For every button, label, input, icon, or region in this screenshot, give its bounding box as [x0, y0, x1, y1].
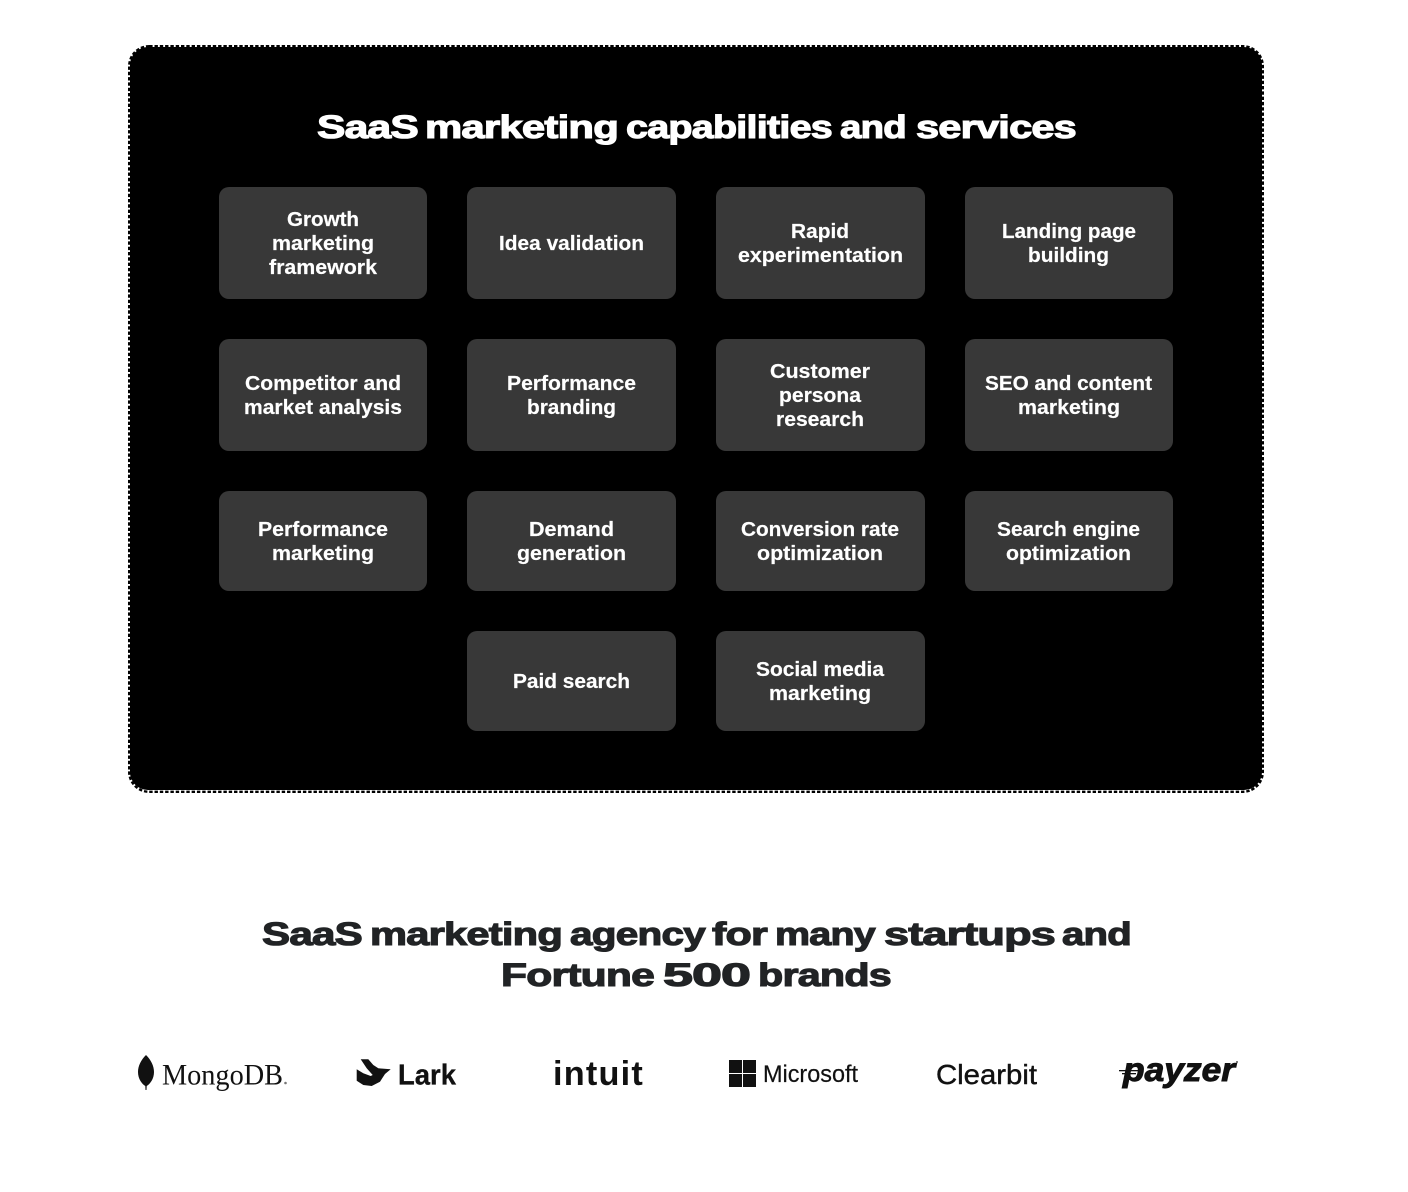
card: Search engine optimization: optimization — [1006, 543, 1131, 565]
card: Competitor and market analysis — [219, 339, 427, 451]
card: Landing page building: building — [1028, 245, 1109, 267]
card: Social media marketing — [716, 631, 925, 731]
card: Performance branding — [467, 339, 676, 451]
logo: Lark — [357, 1059, 457, 1092]
heading: agency clients: startups — [884, 916, 1055, 952]
heading: agency clients: 500 — [663, 957, 750, 993]
card: Customer persona research: research — [776, 409, 864, 431]
card: Growth marketing framework: marketing — [272, 233, 374, 255]
heading: agency clients: brands — [758, 957, 891, 993]
heading: agency clients: marketing — [370, 916, 562, 952]
card: Demand generation: generation — [517, 543, 626, 565]
card: Competitor and market analysis: Competitor and — [245, 373, 401, 395]
heading: agency clients: Fortune — [501, 957, 654, 993]
heading: agency clients: and — [1062, 916, 1131, 952]
card: Conversion rate optimization — [716, 491, 925, 591]
card: Growth marketing framework: Growth — [287, 209, 359, 231]
card: Paid search — [467, 631, 676, 731]
card: Performance branding: Performance — [507, 373, 636, 395]
card: Customer persona research: Customer — [770, 361, 870, 383]
heading: capabilities — [317, 109, 1076, 145]
card: Conversion rate optimization: optimization — [757, 543, 883, 565]
card: Search engine optimization: Search engine — [997, 519, 1140, 541]
logo: Lark: Lark — [398, 1060, 457, 1092]
heading: capabilities: marketing — [425, 109, 618, 145]
heading: agency clients: many — [775, 916, 876, 952]
card: Growth marketing framework — [219, 187, 427, 299]
card: Performance marketing: marketing — [272, 543, 374, 565]
card: Search engine optimization — [965, 491, 1173, 591]
heading: capabilities: services — [916, 109, 1076, 145]
card: Idea validation — [467, 187, 676, 299]
heading: capabilities: capabilities — [626, 109, 832, 145]
heading: agency clients — [262, 916, 1131, 993]
logo: Intuit: intuit — [553, 1055, 644, 1093]
panel: capabilities and services — [129, 46, 1263, 792]
card: Paid search: Paid search — [513, 671, 630, 693]
card: Customer persona research: persona — [779, 385, 862, 407]
card: Landing page building — [965, 187, 1173, 299]
logo row — [138, 1051, 1238, 1093]
card: Demand generation: Demand — [529, 519, 614, 541]
card: Conversion rate optimization: Conversion rate — [741, 519, 899, 541]
card: Social media marketing: Social media — [756, 659, 885, 681]
logo: payzer: payzer — [1122, 1051, 1237, 1088]
card: SEO and content marketing — [965, 339, 1173, 451]
card: Rapid experimentation — [716, 187, 925, 299]
card: Demand generation — [467, 491, 676, 591]
card: Performance marketing — [219, 491, 427, 591]
card: Competitor and market analysis: market analysis — [244, 397, 402, 419]
card: Idea validation: Idea validation — [499, 233, 644, 255]
heading: agency clients: SaaS — [262, 916, 362, 952]
heading: agency clients: agency — [570, 916, 706, 952]
logo: Microsoft: Microsoft — [763, 1061, 858, 1088]
heading: agency clients: for — [712, 916, 767, 952]
card: Rapid experimentation: experimentation — [738, 245, 903, 267]
card: SEO and content marketing: SEO and content — [985, 373, 1152, 395]
heading: capabilities: SaaS — [317, 109, 418, 145]
heading: capabilities: and — [840, 109, 906, 145]
card: Social media marketing: marketing — [769, 683, 871, 705]
card: Landing page building: Landing page — [1002, 221, 1136, 243]
logo: MongoDB: MongoDB — [162, 1058, 283, 1092]
card: Performance branding: branding — [527, 397, 616, 419]
card: SEO and content marketing: marketing — [1018, 397, 1120, 419]
card: Growth marketing framework: framework — [269, 257, 378, 279]
card: Customer persona research — [716, 339, 925, 451]
card: Performance marketing: Performance — [258, 519, 388, 541]
logo: Clearbit: Clearbit — [936, 1059, 1037, 1090]
card: Rapid experimentation: Rapid — [791, 221, 849, 243]
